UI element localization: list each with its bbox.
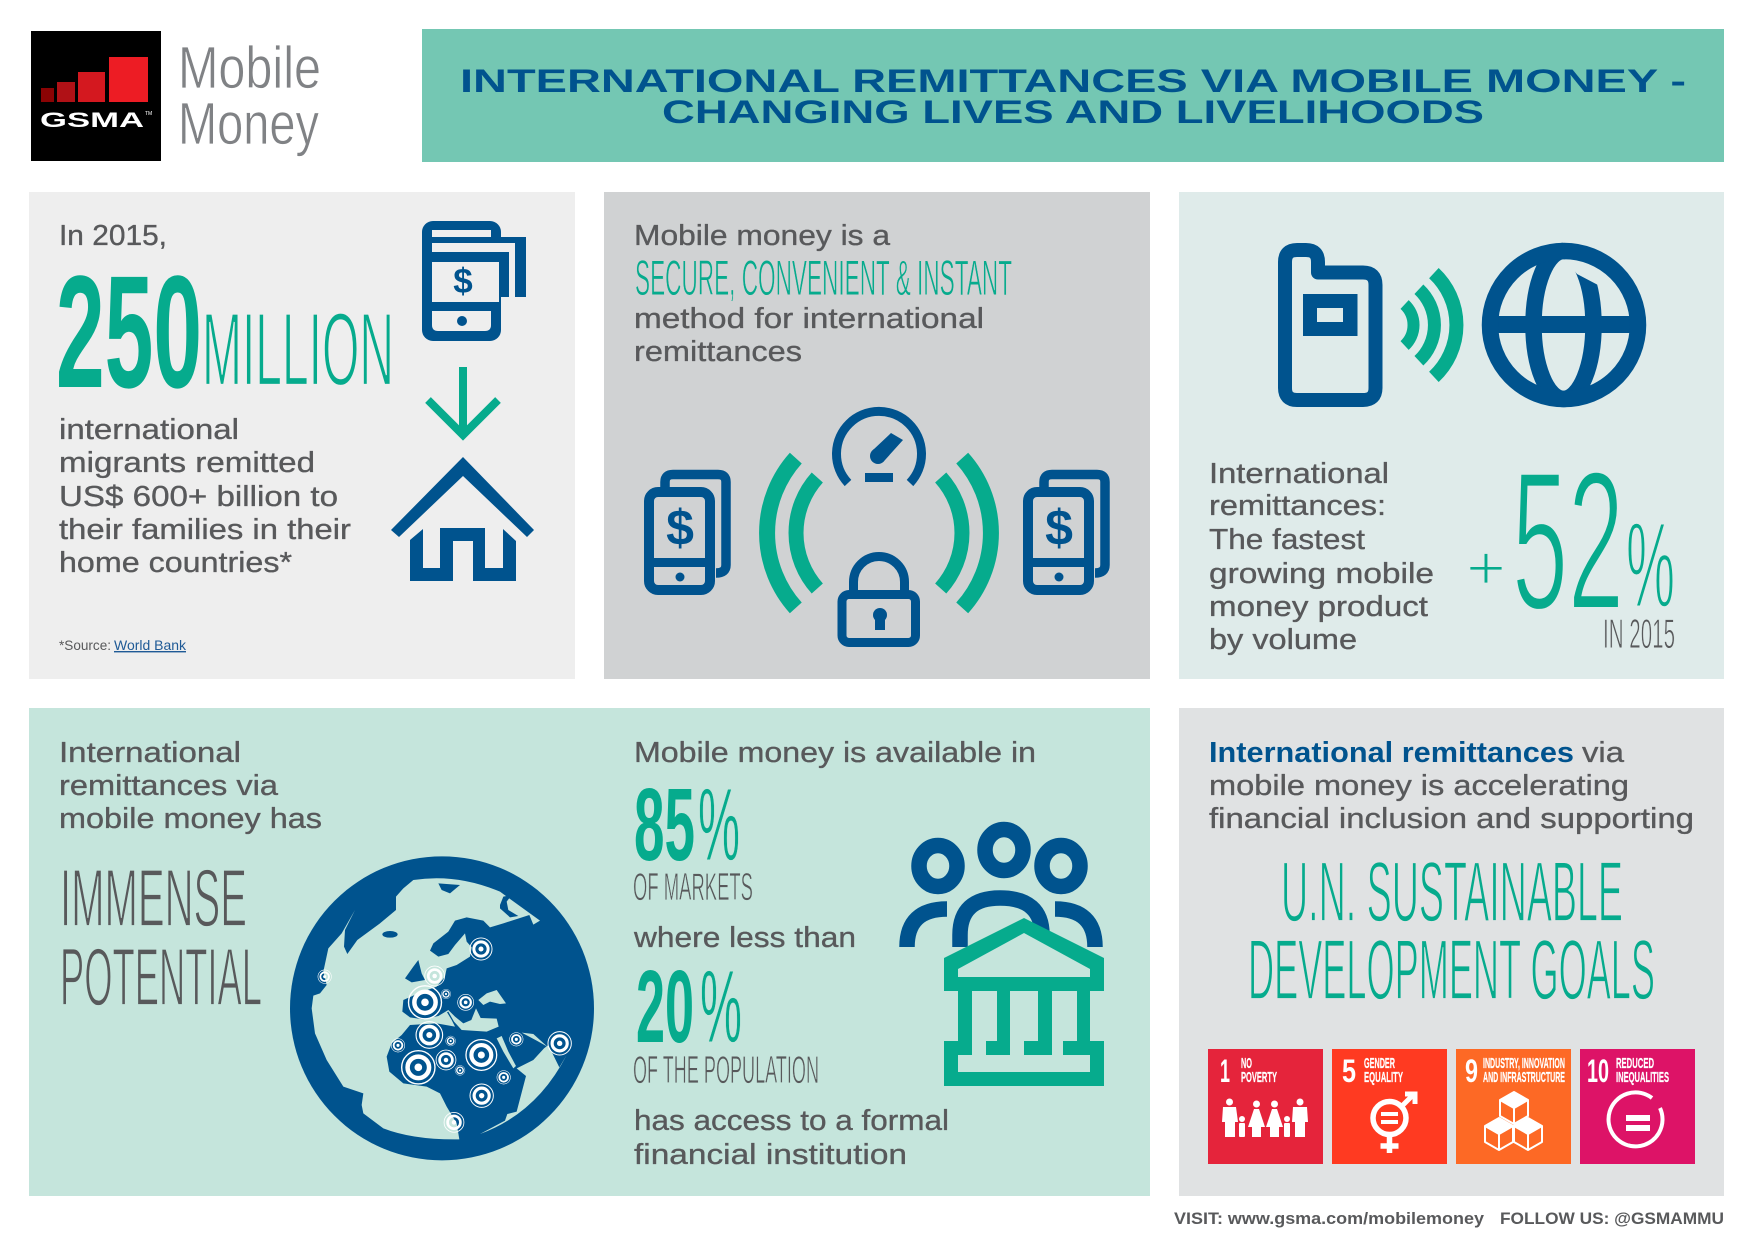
stat: +52% in 2015: +	[1466, 534, 1506, 603]
text: method for international remittances: remittances	[634, 336, 802, 368]
text: method for international remittances: method for international	[634, 303, 984, 335]
logo: GSMA: TM	[145, 111, 152, 117]
text: fastest growing mobile money product: International	[1209, 458, 1389, 490]
SDG tile: 9 industry innovation and infrastructure: 9	[1465, 1053, 1478, 1089]
logo wordmark: Mobile Money	[178, 35, 321, 157]
title banner	[422, 29, 1724, 162]
text: fastest growing mobile money product: remittances:	[1209, 490, 1386, 522]
footer: visit and follow	[1174, 1209, 1724, 1228]
icon: feature phone	[1285, 250, 1376, 400]
panel: 250 million migrants: MILLION	[202, 292, 394, 408]
stat: +52% in 2015: 52	[1512, 430, 1624, 651]
SDG tile: 1 no poverty: POVERTY	[1241, 1069, 1277, 1086]
SDG tile: 9 industry innovation and infrastructure: AND INFRASTRUCTURE	[1483, 1069, 1565, 1086]
source note: World Bank	[114, 637, 187, 653]
title banner: CHANGING LIVES AND LIVELIHOODS	[662, 94, 1484, 130]
icon: bank building	[944, 918, 1104, 1086]
text: international remittances via mobile money has: International	[59, 737, 241, 769]
arrow: down to home	[428, 367, 498, 435]
stat: 20% of the population: %	[700, 949, 742, 1064]
panel: immense potential and availability: OF THE POPULATION	[633, 1049, 819, 1092]
text: method for international remittances	[634, 303, 984, 368]
icon: mobile phone with dollar	[422, 221, 526, 341]
logo: GSMA: GSMA	[40, 109, 144, 132]
text: fastest growing mobile money product	[1209, 458, 1434, 656]
big number: 250 million: 250	[56, 242, 202, 421]
heading: U.N. sustainable development goals	[1248, 845, 1655, 1018]
text: international remittances via mobile money has: remittances via	[59, 770, 279, 802]
SDG tile: 1 no poverty: NO	[1241, 1055, 1252, 1072]
stat: 20% of the population	[633, 949, 819, 1092]
SDG tile: 1 no poverty	[1208, 1049, 1323, 1164]
footer: visit and follow: VISIT: www.gsma.com/mobilemoney	[1174, 1209, 1485, 1228]
text: fastest growing mobile money product: by volume	[1209, 624, 1357, 656]
stat: 85% of markets: %	[698, 767, 740, 882]
text: migrants remitted: international	[59, 414, 239, 446]
text: migrants remitted: US$ 600+ billion to	[59, 481, 338, 513]
SDG tile: 1 no poverty: 1	[1220, 1053, 1230, 1089]
text: accelerating financial inclusion: International remittances	[1209, 737, 1574, 769]
icon: left phone	[649, 474, 726, 590]
SDG tile: 10 reduced inequalities	[1580, 1049, 1695, 1164]
icon: world map globe with target markers	[290, 856, 594, 1160]
text: fastest growing mobile money product: growing mobile	[1209, 558, 1434, 590]
SDG tile: 5 gender equality: 5	[1342, 1053, 1356, 1089]
title banner: INTERNATIONAL REMITTANCES VIA MOBILE MONEY -	[460, 63, 1686, 99]
text: migrants remitted	[59, 414, 351, 579]
text: accelerating financial inclusion: mobile money is accelerating	[1209, 770, 1629, 802]
panel: secure convenient instant	[604, 192, 1150, 679]
icon: wireless waves	[1405, 273, 1456, 377]
text: accelerating financial inclusion	[1209, 737, 1694, 835]
text: migrants remitted: home countries*	[59, 547, 292, 579]
source note: *Source:	[59, 637, 111, 653]
icon: people	[907, 830, 1095, 947]
text: accelerating financial inclusion: via	[1582, 737, 1625, 769]
text: accelerating financial inclusion: financial inclusion and supporting	[1209, 803, 1694, 835]
panel: fastest growing product: %	[1626, 497, 1675, 633]
icon: right phone	[1028, 474, 1105, 590]
text: has access to a formal financial institution: financial institution	[634, 1139, 907, 1171]
icon: padlock	[842, 556, 916, 642]
panel: 250 million migrants	[29, 192, 575, 679]
text: has access to a formal financial institution: has access to a formal	[634, 1105, 949, 1137]
text: fastest growing mobile money product: money product	[1209, 591, 1428, 623]
panel: fastest growing product: IN 2015	[1603, 610, 1675, 657]
icon: house	[391, 457, 534, 581]
icon: family	[1222, 1098, 1308, 1137]
text: fastest growing mobile money product: The fastest	[1209, 524, 1365, 556]
panel: immense potential and availability: POTENTIAL	[60, 932, 262, 1023]
stat: +52% in 2015	[1466, 430, 1675, 657]
heading: immense potential: IMMENSE	[60, 853, 247, 944]
panel: immense potential and availability	[29, 708, 1150, 1196]
text: where less than: where less than	[633, 922, 856, 954]
stat: 20% of the population: 20	[636, 949, 694, 1064]
panel: immense potential and availability: OF MARKETS	[633, 866, 753, 909]
panel: fastest growing product	[1179, 192, 1724, 679]
text: mobile money is available in: Mobile money is available in	[634, 737, 1036, 769]
text: international remittances via mobile money has	[59, 737, 322, 835]
text: migrants remitted: their families in their	[59, 514, 351, 546]
SDG tile: 10 reduced inequalities: REDUCED	[1616, 1055, 1654, 1072]
icon: speed gauge	[837, 411, 922, 483]
SDG tile: 5 gender equality: GENDER	[1364, 1055, 1395, 1072]
logo wordmark: Mobile Money: Mobile	[178, 35, 321, 101]
footer: visit and follow: FOLLOW US: @GSMAMMU	[1500, 1209, 1724, 1228]
SDG tile: 9 industry innovation and infrastructure: INDUSTRY, INNOVATION	[1483, 1055, 1565, 1072]
icon: equality circle	[1609, 1092, 1663, 1146]
SDG tile: 10 reduced inequalities: INEQUALITIES	[1616, 1069, 1669, 1086]
SDG tile: 10 reduced inequalities: 10	[1587, 1053, 1609, 1089]
icon: gender equality symbol	[1373, 1094, 1415, 1153]
icon: stacked cubes	[1485, 1092, 1542, 1150]
source note	[59, 637, 187, 653]
logo wordmark: Mobile Money: Money	[178, 91, 319, 157]
text: migrants remitted: migrants remitted	[59, 447, 315, 479]
text: international remittances via mobile money has: mobile money has	[59, 803, 322, 835]
icon: globe	[1490, 240, 1640, 399]
panel: secure convenient instant: SECURE, CONVENIENT & INSTANT	[635, 250, 1012, 306]
stat: 85% of markets: 85	[634, 767, 695, 882]
icon: green signal arcs	[767, 458, 991, 608]
text: In 2015: In 2015,	[59, 220, 167, 252]
SDG tile: 5 gender equality: EQUALITY	[1364, 1069, 1403, 1086]
panel: sustainable development goals	[1179, 708, 1724, 1196]
logo: GSMA	[31, 31, 161, 161]
SDG tile: 9 industry innovation and infrastructure	[1456, 1049, 1571, 1164]
text: mobile money is a: Mobile money is a	[634, 220, 891, 252]
heading: immense potential	[60, 853, 262, 1023]
icon: mobile phone with dollar: $	[453, 262, 473, 301]
SDG tile: 5 gender equality	[1332, 1049, 1447, 1164]
text: has access to a formal financial institution	[634, 1105, 949, 1171]
